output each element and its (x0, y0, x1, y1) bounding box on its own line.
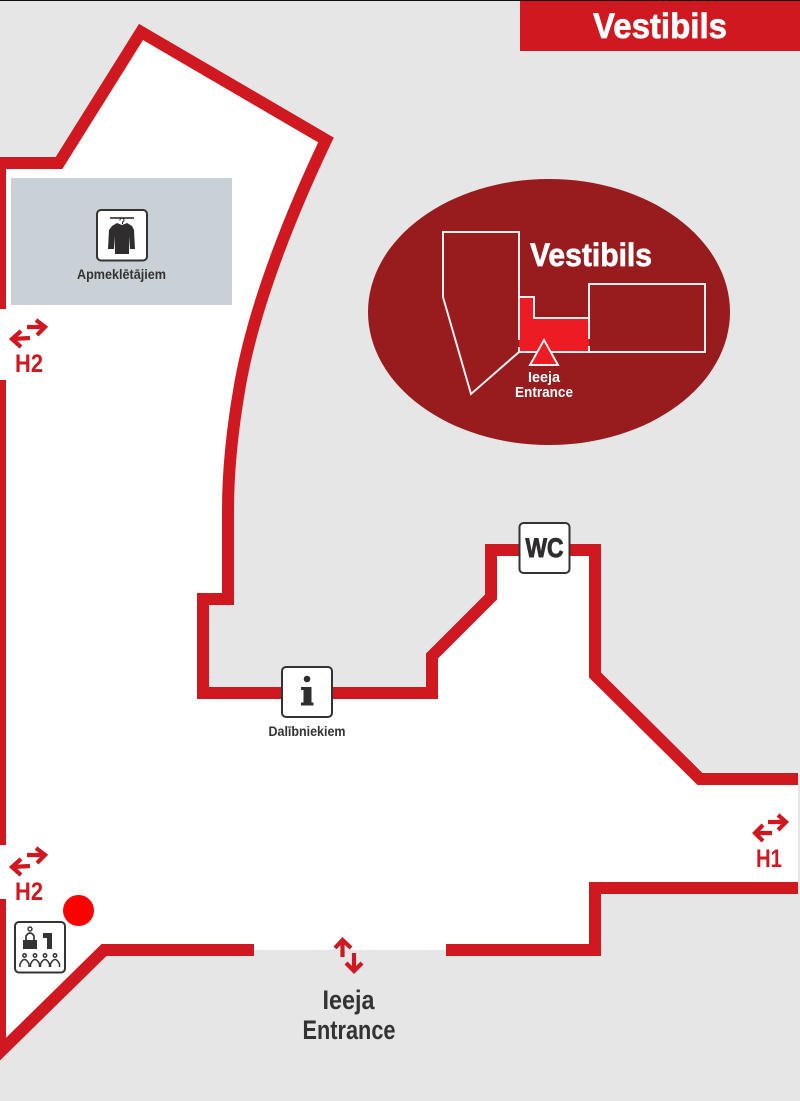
cloakroom label: Apmeklētājiem (77, 266, 166, 282)
exit H2 upper (12, 320, 45, 378)
exit H1: H1 (756, 845, 782, 873)
icon: two-way arrows (12, 848, 45, 875)
panel: visitor cloakroom (11, 178, 232, 305)
left wall segments (0, 163, 6, 1049)
header banner (520, 1, 800, 51)
icon: entrance arrows (335, 940, 362, 971)
entrance label: Entrance (302, 1015, 396, 1045)
entrance label (302, 985, 396, 1045)
locator entrance label: Ieeja (528, 370, 561, 386)
icon: coat on hanger (97, 210, 147, 260)
exit H2 lower: H2 (15, 878, 43, 906)
entrance label: Ieeja (322, 985, 375, 1015)
icon: WC (520, 523, 570, 573)
locator entrance marker (530, 340, 558, 365)
locator title: Vestibils (530, 237, 652, 273)
icon: WC: WC (526, 533, 564, 563)
locator highlighted lobby (519, 297, 589, 352)
icon: auditorium 1 (15, 922, 65, 972)
icon: participant information (282, 667, 332, 717)
header banner: Vestibils (593, 7, 727, 46)
you-are-here marker (63, 895, 94, 926)
icon: two-way arrows (755, 815, 786, 841)
locator room outlines (443, 232, 705, 394)
locator entrance label: Entrance (515, 385, 573, 401)
information label: Dalībniekiem (268, 723, 346, 739)
exit H1 (755, 815, 786, 873)
icon: two-way arrows (12, 320, 45, 347)
exit H2 lower (12, 848, 45, 906)
entrance threshold (254, 950, 446, 1101)
locator map (368, 179, 730, 445)
locator entrance label (515, 370, 573, 401)
exit H2 upper: H2 (15, 350, 43, 378)
